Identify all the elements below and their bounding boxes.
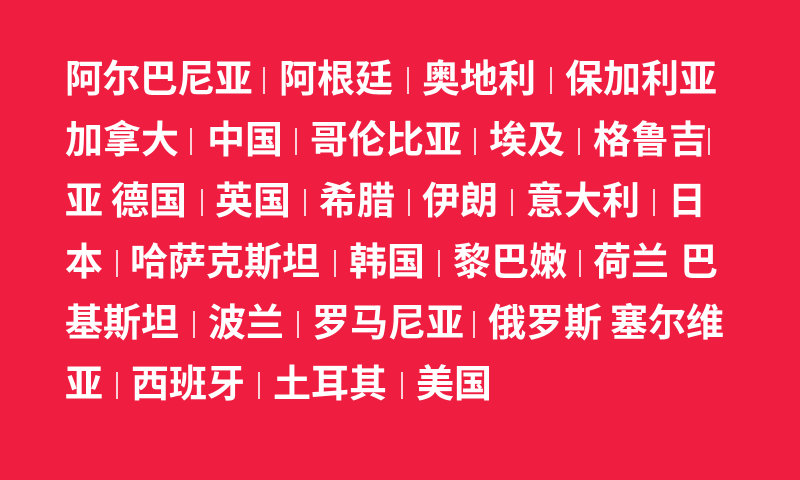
text line 4: 巴 [680, 242, 718, 284]
text line 5: 波兰 [208, 303, 284, 345]
text line 4: 韩国 [349, 242, 425, 284]
text line 1 [65, 59, 717, 101]
text line 6: 亚 [65, 364, 103, 406]
text line 4: 本 [65, 242, 103, 284]
text line 5: 罗马尼亚 [312, 303, 464, 345]
text line 2: 加拿大 [65, 120, 179, 162]
text line 5: 基斯坦 [65, 303, 179, 345]
text line 1: 奥地利 [422, 59, 536, 101]
text line 3: 意大利 [526, 181, 640, 223]
text line 6 [65, 364, 492, 406]
text line 3 [65, 181, 706, 223]
text line 3: 希腊 [319, 181, 395, 223]
text line 3: 德国 [111, 181, 187, 223]
text line 2: 中国 [207, 120, 283, 162]
text line 5 [65, 302, 724, 345]
text line 6: 土耳其 [273, 364, 387, 406]
text line 2 [65, 120, 710, 162]
text line 3: 日 [668, 181, 706, 223]
text line 4: 荷兰 [593, 242, 669, 284]
text line 6: 美国 [416, 364, 492, 406]
text line 4: 哈萨克斯坦 [130, 242, 320, 284]
text line 4 [65, 242, 718, 284]
text line 4: 黎巴嫩 [453, 242, 567, 284]
text line 5: 塞尔维 [610, 303, 724, 345]
text line 6: 西班牙 [131, 364, 245, 406]
text line 1: 保加利亚 [565, 59, 717, 101]
text line 5: 俄罗斯 [488, 303, 602, 345]
text line 2: 格鲁吉 [593, 120, 707, 162]
text line 2: 埃及 [489, 120, 565, 162]
text line 2: 哥伦比亚 [310, 120, 462, 162]
text line 3: 伊朗 [422, 181, 498, 223]
text line 1: 阿尔巴尼亚 [65, 59, 252, 101]
text line 1: 阿根廷 [279, 59, 393, 101]
text line 3: 亚 [65, 181, 103, 223]
text line 3: 英国 [215, 181, 291, 223]
